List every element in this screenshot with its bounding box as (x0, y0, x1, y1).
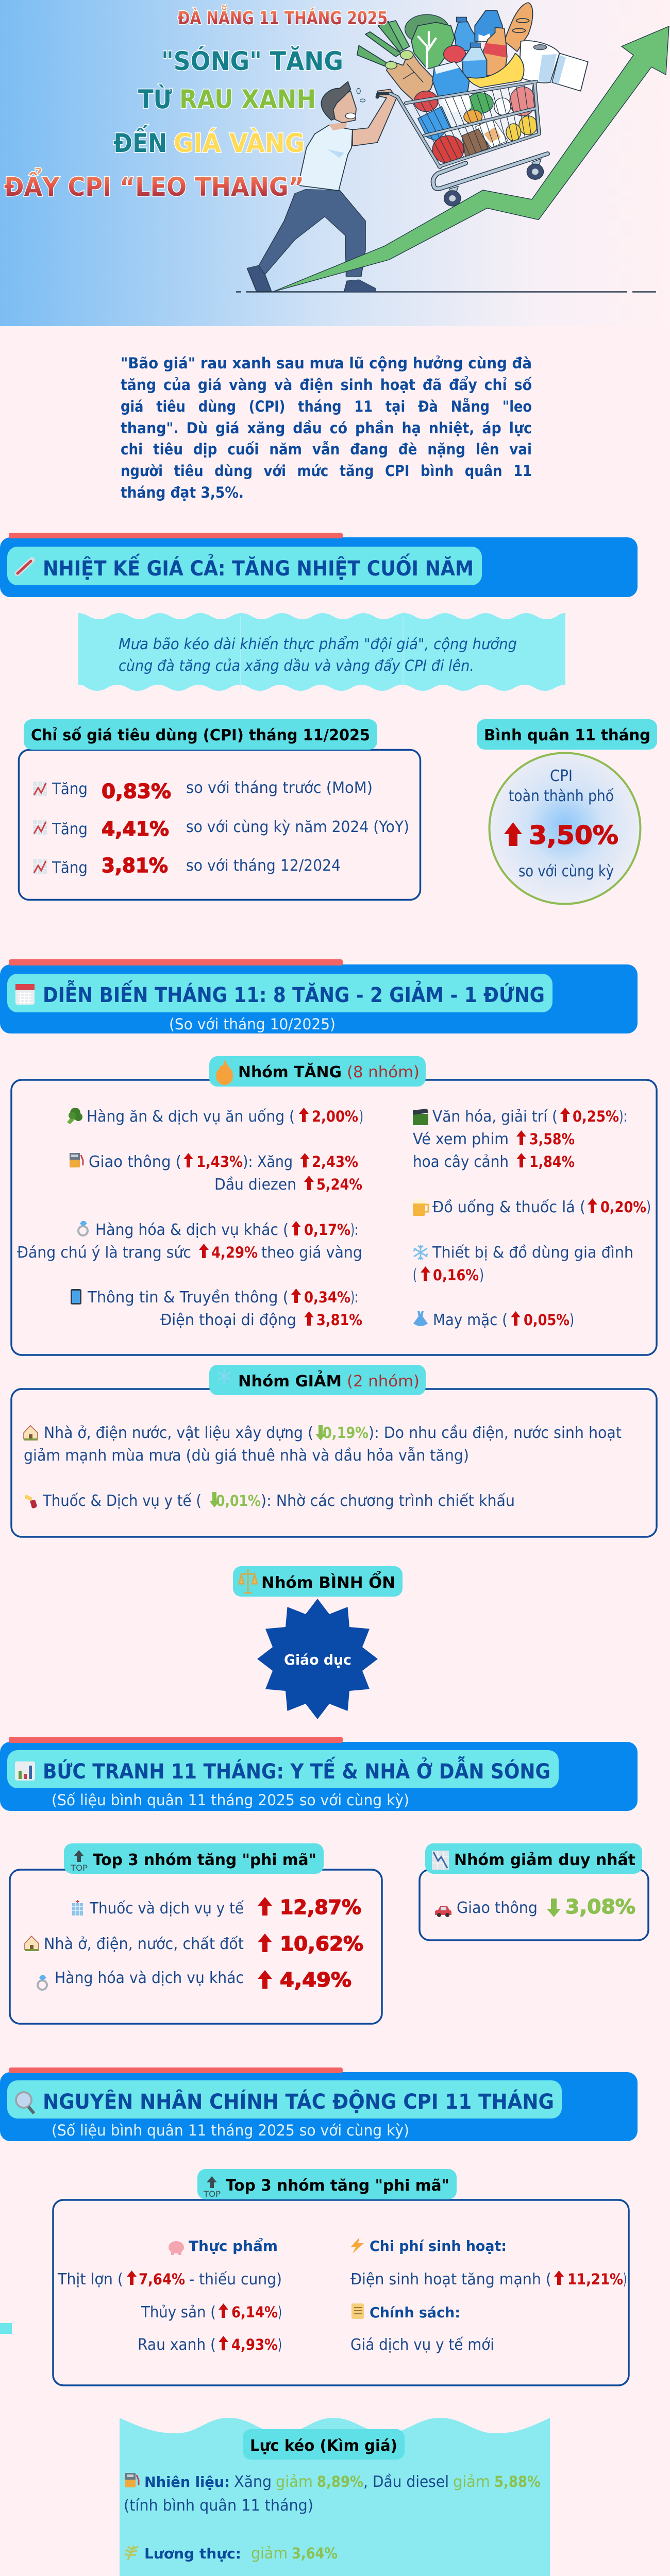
title: location and period: ĐÀ NẴNG 11 THÁNG 2025 (178, 5, 388, 29)
icon: top arrow (203, 2176, 221, 2199)
row: other goods: Hàng hóa và dịch vụ khác (55, 1969, 244, 1987)
row: diesel: 5,24% (316, 1176, 362, 1193)
column: food: 4,93% (231, 2336, 278, 2353)
star badge (257, 1599, 378, 1719)
row: MoM: Tăng (52, 780, 88, 798)
row: medicine: Thuốc và dịch vụ y tế (89, 1900, 244, 1918)
row: YoY: so với cùng kỳ năm 2024 (YoY) (186, 818, 409, 836)
row: other goods: 4,49% (280, 1969, 351, 1991)
column: living costs: Chi phí sinh hoạt: (370, 2238, 507, 2255)
row: telecom: Thông tin & Truyền thông ( (87, 1289, 289, 1307)
panel heading: Nhóm giảm duy nhất (454, 1851, 635, 1869)
icon: chart down (432, 1851, 449, 1870)
row: household value: ( (413, 1266, 417, 1284)
panel: only decreasing group (420, 1843, 648, 1940)
icon: lightning bolt (350, 2238, 364, 2253)
row: phone: 3,81% (316, 1311, 362, 1329)
row: fuel note: (tính bình quân 11 tháng) (124, 2497, 313, 2515)
row: vs 12/2024: Tăng (52, 859, 88, 877)
column: food: ) (278, 2303, 282, 2321)
hero banner (0, 0, 670, 326)
row: vs 12/2024 (33, 854, 341, 877)
row: medicine: 0,01% (216, 1492, 261, 1510)
row: food: Hàng ăn & dịch vụ ăn uống ( (87, 1108, 295, 1126)
row: transport: Giao thông ( (89, 1153, 181, 1171)
column: living costs (350, 2238, 627, 2354)
panel heading: Chỉ số giá tiêu dùng (CPI) tháng 11/2025 (31, 726, 370, 744)
row: MoM: 0,83% (102, 780, 171, 803)
title line 4: ĐẨY CPI “LEO THANG” (4, 167, 304, 202)
row: clothing: ) (569, 1311, 574, 1329)
row: jewellery: theo giá vàng (261, 1244, 362, 1262)
circle text: 3,50% (529, 821, 618, 850)
row: beverages: ) (646, 1198, 651, 1216)
row: MoM (33, 779, 373, 803)
intro paragraph: người tiêu dùng với mức tăng CPI bình quân 11 (121, 462, 532, 480)
panel heading (238, 1062, 420, 1081)
row: food: ) (359, 1108, 363, 1126)
star label: Giáo dục (284, 1651, 351, 1668)
section header: main causes (0, 2067, 638, 2141)
small cyan marker (0, 2323, 12, 2334)
title line 2: TỪ (138, 84, 172, 114)
row: medicine (72, 1896, 361, 1919)
column: living costs: Chính sách: (370, 2304, 460, 2321)
icon: thermometer (18, 560, 32, 573)
row: YoY (33, 818, 409, 840)
subheading: (So với tháng 10/2025) (169, 1015, 336, 1033)
row: transport: 1,43% (196, 1153, 243, 1171)
heading text: DIỄN BIẾN THÁNG 11: 8 TĂNG - 2 GIẢM - 1 ĐỨNG (43, 979, 545, 1007)
icon: top arrow (70, 1850, 88, 1873)
row: fuel: giảm (453, 2473, 490, 2491)
row: medicine: Thuốc & Dịch vụ y tế ( (42, 1492, 202, 1510)
heading text: NHIỆT KẾ GIÁ CẢ: TĂNG NHIỆT CUỐI NĂM (43, 553, 474, 581)
icon: bar chart (15, 1761, 35, 1781)
circle badge (490, 753, 640, 904)
row: culture: Văn hóa, giải trí ( (432, 1108, 558, 1126)
row: culture: ): (619, 1108, 627, 1126)
row: cinema: Vé xem phim (413, 1130, 509, 1148)
panel heading: Bình quân 11 tháng (484, 726, 650, 744)
row: telecom: 0,34% (304, 1289, 350, 1306)
column: living costs: Điện sinh hoạt tăng mạnh ( (350, 2270, 551, 2289)
row: beverages: 0,20% (600, 1198, 646, 1216)
row: transport: Giao thông (457, 1899, 538, 1917)
panel heading: Top 3 nhóm tăng "phi mã" (93, 1851, 316, 1869)
row: phone: Điện thoại di động (160, 1311, 296, 1329)
circle text: so với cùng kỳ (518, 862, 614, 880)
illustration: shopper legs (247, 189, 375, 292)
row: transport (435, 1895, 635, 1918)
row: housing line 2: giảm mạnh mùa mưa (dù giá thuê nhà và dầu hỏa vẫn tăng) (24, 1447, 469, 1465)
icon: magnifier (16, 2092, 34, 2113)
intro paragraph: tăng của giá vàng và điện sinh hoạt đã đẩy chỉ số (121, 376, 532, 394)
icon: flame (216, 1059, 233, 1085)
ground line (236, 291, 656, 293)
row: culture (413, 1108, 627, 1126)
panel heading: Lực kéo (Kìm giá) (250, 2437, 397, 2455)
row: diesel (214, 1176, 362, 1194)
row: household value: ) (479, 1266, 484, 1284)
icon: calendar (15, 984, 35, 1005)
row: telecom: ): (350, 1289, 358, 1307)
row: fuel: 8,89% (317, 2473, 363, 2490)
panel: increasing groups (11, 1056, 657, 1355)
panel: 11-month average (477, 719, 657, 904)
panel heading: (2 nhóm) (347, 1372, 420, 1391)
row: fuel: 5,88% (494, 2473, 541, 2490)
panel heading: Nhóm BÌNH ỔN (261, 1570, 395, 1592)
icon: top arrow: TOP (70, 1863, 88, 1873)
row: jewellery (17, 1244, 362, 1262)
intro paragraph: tháng đạt 3,5%. (121, 484, 244, 501)
row: fuel: giảm (276, 2473, 313, 2491)
column: food: ) (278, 2336, 282, 2354)
row: YoY: Tăng (52, 820, 88, 838)
subheading: (Số liệu bình quân 11 tháng 2025 so với cùng kỳ) (52, 1791, 409, 1809)
row: diesel: Dầu diezen (214, 1176, 296, 1194)
title line 1: "SÓNG" TĂNG (161, 46, 343, 76)
row: beverages: Đồ uống & thuốc lá ( (432, 1198, 585, 1216)
row: clothing (413, 1311, 574, 1329)
icon: top arrow: TOP (203, 2189, 221, 2199)
panel heading: Nhóm TĂNG (238, 1062, 342, 1081)
column: living costs: Giá dịch vụ y tế mới (350, 2336, 494, 2354)
row: housing: 10,62% (280, 1933, 363, 1955)
row: other goods: ): (350, 1221, 358, 1239)
row: housing: Nhà ở, điện, nước, chất đốt (44, 1935, 244, 1953)
section header: 11-month picture (0, 1737, 638, 1811)
title line 2: RAU XANH (179, 84, 316, 114)
row: cinema: 3,58% (529, 1130, 575, 1148)
illustration: shopper upper body and shopping cart (298, 3, 588, 206)
column: food: Thực phẩm (189, 2237, 278, 2255)
panel heading (238, 1370, 420, 1391)
column: food: 7,64% (139, 2270, 185, 2288)
icon: pale snowflake (217, 1368, 231, 1384)
column: food: Thịt lợn ( (57, 2270, 123, 2289)
wavy panel: price restraints (120, 2418, 550, 2576)
column: living costs: 11,21% (567, 2270, 623, 2288)
panel: CPI 11/2025 (19, 719, 421, 900)
row: other goods (38, 1969, 351, 1991)
column: food: - thiếu cung) (189, 2270, 282, 2289)
row: beverages (413, 1198, 651, 1216)
section header: november movement (0, 959, 638, 1033)
row: flowers: hoa cây cảnh (413, 1153, 509, 1171)
row: medicine: 12,87% (280, 1896, 361, 1919)
title line 2 (138, 84, 316, 114)
row: jewellery: 4,29% (211, 1244, 258, 1261)
row: jewellery: Đáng chú ý là trang sức (17, 1244, 191, 1262)
row: medicine: ): Nhờ các chương trình chiết khấu (261, 1492, 515, 1510)
icon: scroll (351, 2303, 364, 2319)
row: cinema (413, 1130, 575, 1148)
row: other goods: 0,17% (304, 1221, 350, 1239)
row: fuel: Nhiên liệu: (144, 2473, 230, 2490)
row: vs 12/2024: so với tháng 12/2024 (186, 857, 341, 875)
row: housing (25, 1933, 363, 1955)
callout text: Mưa bão kéo dài khiến thực phẩm "đội giá", cộng hưởng (119, 635, 517, 653)
intro paragraph: chi tiêu dịp cuối năm vẫn đang đè nặng lên vai (121, 440, 532, 458)
row: medicine (24, 1492, 515, 1510)
column: food: Rau xanh ( (138, 2336, 216, 2354)
intro paragraph: thang". Dù giá xăng dầu có phần hạ nhiệt, áp lực (121, 419, 532, 437)
column: living costs: ) (623, 2270, 627, 2289)
row: grain: giảm (251, 2545, 288, 2563)
row: housing (24, 1424, 622, 1442)
intro paragraph: giá tiêu dùng (CPI) tháng 11 tại Đà Nẵng "leo (121, 398, 532, 415)
row: vs 12/2024: 3,81% (102, 854, 168, 877)
row: food: 2,00% (312, 1108, 358, 1125)
row: clothing: May mặc ( (433, 1311, 508, 1329)
row: housing: 0,19% (323, 1424, 368, 1442)
title line 3 (113, 125, 305, 158)
icon: scales (239, 1569, 257, 1593)
row: grain (125, 2545, 338, 2563)
column: food: Thủy sản ( (141, 2303, 216, 2321)
row: housing: Nhà ở, điện nước, vật liệu xây dựng ( (44, 1424, 313, 1442)
illustration: rising green arrow (273, 26, 669, 292)
row: transport: 2,43% (312, 1153, 358, 1171)
row: transport: 3,08% (565, 1895, 635, 1918)
heading text: BỨC TRANH 11 THÁNG: Y TẾ & NHÀ Ở DẪN SÓNG (43, 1756, 550, 1784)
panel: causes (53, 2169, 629, 2385)
row: household: Thiết bị & đồ dùng gia đình (432, 1244, 633, 1262)
panel: stable group (233, 1566, 403, 1719)
row: housing: ): Do nhu cầu điện, nước sinh hoạt (368, 1424, 622, 1442)
circle text: CPI (550, 767, 573, 785)
row: flowers: 1,84% (529, 1153, 575, 1171)
panel heading: (8 nhóm) (347, 1063, 420, 1081)
row: transport (70, 1153, 358, 1171)
row: YoY: 4,41% (102, 818, 169, 840)
title line 3: GIÁ VÀNG (174, 128, 305, 158)
row: fuel: , Dầu diesel (363, 2473, 449, 2491)
icon: pig (169, 2241, 184, 2255)
intro paragraph (121, 354, 532, 501)
panel: decreasing groups (11, 1365, 657, 1537)
section header: thermometer (0, 533, 638, 597)
row: culture: 0,25% (573, 1108, 619, 1125)
row: MoM: so với tháng trước (MoM) (186, 779, 373, 797)
wavy callout (78, 613, 565, 691)
row: flowers (413, 1153, 575, 1171)
heading text: NGUYÊN NHÂN CHÍNH TÁC ĐỘNG CPI 11 THÁNG (43, 2089, 554, 2114)
circle text (504, 767, 618, 880)
row: fuel (125, 2473, 541, 2491)
circle text: toàn thành phố (509, 787, 614, 805)
panel: top 3 rising (10, 1843, 382, 2024)
row: other goods: Hàng hóa & dịch vụ khác ( (95, 1221, 289, 1239)
row: fuel: Xăng (234, 2473, 272, 2491)
subheading: (Số liệu bình quân 11 tháng 2025 so với cùng kỳ) (52, 2122, 409, 2139)
callout text: cùng đà tăng của xăng dầu và vàng đẩy CPI đi lên. (119, 657, 474, 674)
row: household value (413, 1266, 484, 1284)
panel heading: Top 3 nhóm tăng "phi mã" (226, 2177, 449, 2195)
row: transport: ): Xăng (243, 1153, 293, 1171)
column: food: 6,14% (231, 2303, 278, 2321)
panel heading: Nhóm GIẢM (238, 1370, 342, 1391)
intro paragraph: "Bão giá" rau xanh sau mưa lũ cộng hưởng cùng đà (121, 354, 532, 372)
row: household value: 0,16% (433, 1266, 479, 1284)
column: food (57, 2237, 282, 2354)
row: grain: Lương thực: (144, 2545, 241, 2562)
title line 3: ĐẾN (113, 125, 167, 158)
row: clothing: 0,05% (524, 1311, 569, 1329)
callout text (119, 635, 517, 674)
row: grain: 3,64% (292, 2545, 338, 2562)
